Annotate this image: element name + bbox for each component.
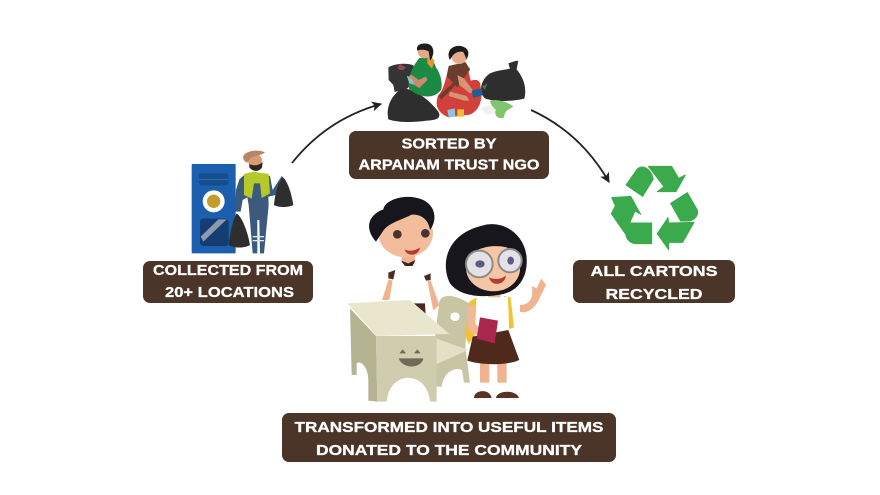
woman in red sari	[437, 46, 482, 117]
sorted recyclables	[447, 83, 513, 118]
desk	[347, 300, 449, 402]
icon: recycling symbol	[611, 166, 698, 250]
label: recycled: RECYCLED	[606, 287, 702, 303]
large waste bag	[388, 88, 439, 122]
chair	[435, 296, 470, 387]
left waste bag	[229, 213, 250, 247]
waste collector	[235, 151, 285, 253]
arrow: sorted to recycled	[531, 110, 609, 182]
girl	[446, 224, 546, 398]
blue collection bin	[192, 164, 236, 253]
label: transformed: TRANSFORMED INTO USEFUL ITEMS	[294, 420, 604, 436]
label: transformed	[282, 413, 616, 462]
label: collected	[143, 261, 313, 303]
label: transformed: DONATED TO THE COMMUNITY	[316, 443, 582, 459]
right waste bag	[274, 177, 293, 207]
right waste bag	[481, 61, 525, 101]
icon: collector beside collection bin	[192, 151, 293, 253]
icon: school children with smiling desk	[347, 197, 546, 402]
icon: women sorting waste	[388, 44, 525, 122]
label: recycled: ALL CARTONS	[590, 264, 718, 280]
label: sorted: SORTED BY	[402, 136, 497, 152]
label: sorted	[349, 131, 549, 179]
boy	[369, 197, 439, 320]
woman in green sari	[407, 44, 442, 96]
arrow: collected to sorted	[292, 104, 381, 163]
label: recycled	[573, 260, 735, 303]
label: sorted: ARPANAM TRUST NGO	[358, 158, 540, 174]
label: collected: 20+ LOCATIONS	[165, 285, 294, 301]
label: collected: COLLECTED FROM	[153, 263, 303, 279]
small waste bag	[388, 64, 417, 92]
